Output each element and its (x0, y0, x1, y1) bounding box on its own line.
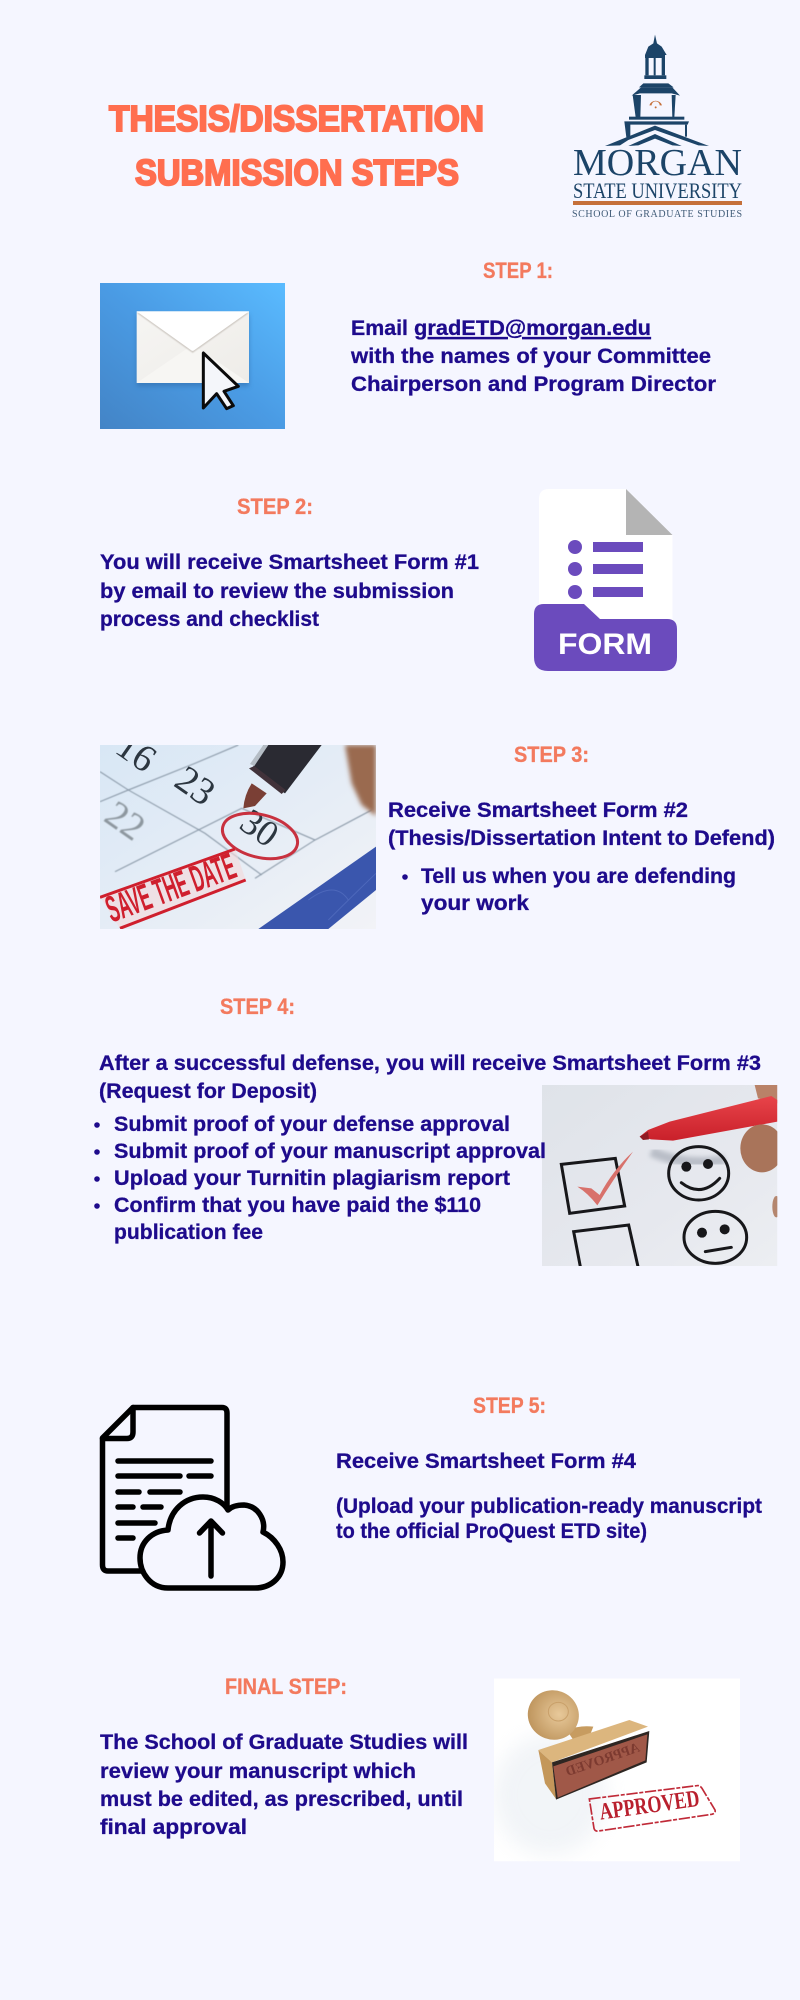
step 1 text: Email (351, 316, 408, 340)
step 3 text: your work (421, 891, 529, 915)
step 4 text: publication fee (114, 1220, 263, 1244)
icon: document with cloud upload (102, 1408, 283, 1588)
panel: final step (100, 1674, 740, 1861)
step 4 text: Upload your Turnitin plagiarism report (114, 1166, 510, 1190)
step 4 text (94, 1051, 761, 1244)
step 5 text: to the official ProQuest ETD site) (336, 1519, 647, 1543)
title: THESIS/DISSERTATION (109, 98, 484, 139)
step 5 text (336, 1449, 762, 1543)
step 1 text: with the names of your Committee (350, 344, 711, 368)
step 4 text: Confirm that you have paid the $110 (114, 1193, 481, 1217)
step 4 text: (Request for Deposit) (99, 1079, 317, 1103)
panel: step 5 (102, 1393, 762, 1588)
step 1 heading: STEP 1: (483, 258, 553, 283)
step 1 text: gradETD@morgan.edu (414, 316, 651, 340)
final step text (100, 1730, 468, 1839)
image: calendar save the date: 16 (108, 725, 164, 781)
panel: step 1 (100, 258, 717, 429)
step 3 text: (Thesis/Dissertation Intent to Defend) (388, 826, 775, 850)
final step heading: FINAL STEP: (225, 1674, 347, 1699)
image: approved rubber stamp (493, 1678, 740, 1861)
step 4 text: Submit proof of your defense approval (114, 1112, 510, 1136)
image: calendar save the date: SAVE THE DATE (100, 845, 241, 930)
step 5 heading: STEP 5: (473, 1393, 546, 1418)
step 5 text: Receive Smartsheet Form #4 (336, 1449, 636, 1473)
title: SUBMISSION STEPS (135, 152, 459, 193)
final step text: final approval (100, 1815, 247, 1839)
step 2 text: You will receive Smartsheet Form #1 (100, 550, 479, 574)
panel: step 2 (100, 489, 677, 671)
step 1 text (350, 316, 717, 396)
image: calendar save the date: 30 (233, 800, 287, 855)
logo: Morgan State University School of Graduate Studies: SCHOOL OF GRADUATE STUDIES (572, 209, 742, 220)
step 3 heading: STEP 3: (514, 742, 589, 767)
step 3 text (388, 798, 775, 915)
step 2 text: by email to review the submission (100, 579, 454, 603)
step 2 text: process and checklist (100, 607, 319, 631)
step 4 text: After a successful defense, you will receive Smartsheet Form #3 (99, 1051, 761, 1075)
final step text: must be edited, as prescribed, until (100, 1787, 463, 1811)
step 5 text: (Upload your publication-ready manuscript (336, 1494, 762, 1518)
logo: Morgan State University School of Graduate Studies: MORGAN (573, 142, 742, 184)
step 3 text: Receive Smartsheet Form #2 (388, 798, 688, 822)
image: envelope with cursor (100, 283, 285, 429)
panel: step 4 (94, 994, 784, 1267)
final step text: The School of Graduate Studies will (100, 1730, 468, 1754)
step 2 text (100, 550, 479, 631)
step 3 text: Tell us when you are defending (421, 864, 736, 888)
icon: form document (534, 489, 677, 671)
step 4 text: Submit proof of your manuscript approval (114, 1139, 546, 1163)
image: checklist with red marker (542, 1085, 784, 1267)
step 2 heading: STEP 2: (237, 494, 313, 519)
step 1 text: Chairperson and Program Director (351, 372, 717, 396)
image: approved rubber stamp: APPROVED (564, 1741, 642, 1780)
final step text: review your manuscript which (100, 1759, 416, 1783)
logo: Morgan State University School of Graduate Studies (572, 35, 742, 220)
panel: step 3 (100, 745, 774, 929)
logo: Morgan State University School of Graduate Studies: STATE UNIVERSITY (573, 178, 742, 203)
icon: form document: FORM (558, 628, 652, 661)
image: calendar save the date: 23 (167, 758, 223, 814)
title (109, 98, 484, 193)
image: approved rubber stamp: APPROVED (598, 1786, 701, 1826)
step 4 heading: STEP 4: (220, 994, 295, 1019)
image: calendar save the date: 22 (97, 793, 153, 849)
